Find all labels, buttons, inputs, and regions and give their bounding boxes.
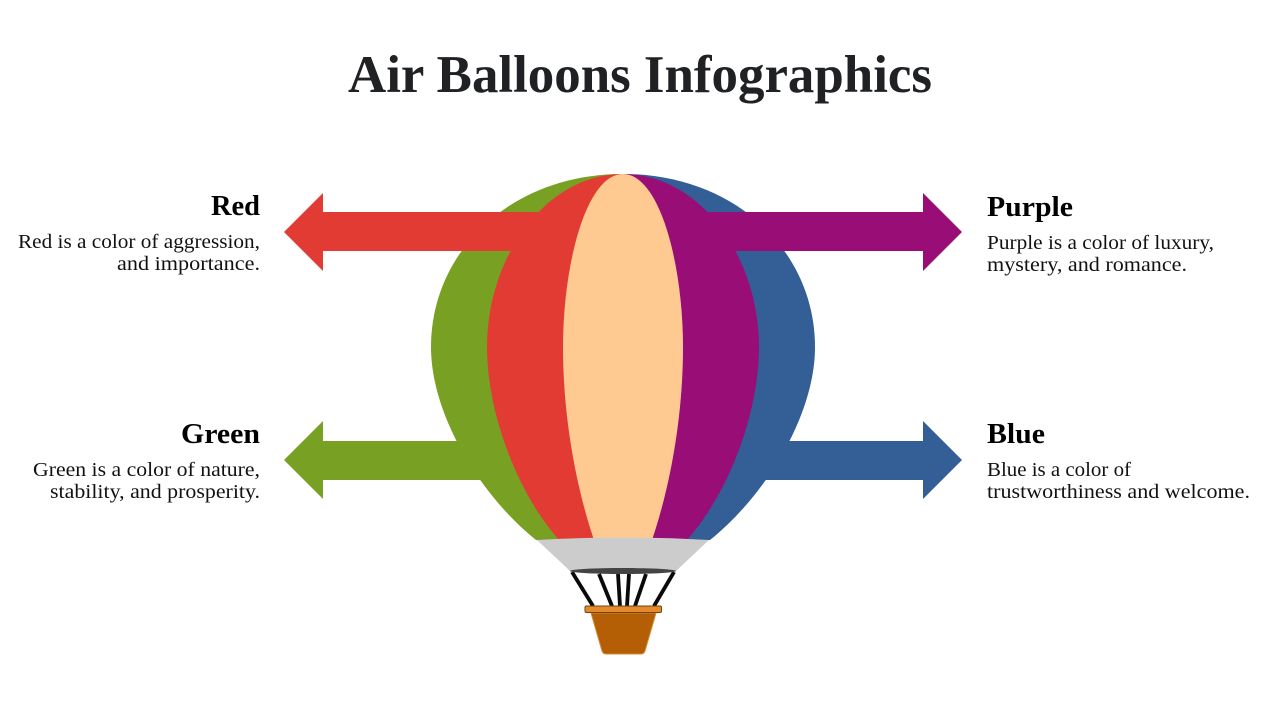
arrow: green [284, 421, 490, 499]
text block: blue: Blue is a color of [987, 460, 1132, 481]
balloon panel: purple [623, 174, 759, 540]
text block: red: and importance. [117, 254, 260, 275]
basket [591, 613, 656, 654]
text block: purple: Purple is a color of luxury, [987, 233, 1214, 254]
ropes [572, 572, 674, 606]
balloon skirt [537, 538, 709, 571]
balloon panel: green [431, 174, 623, 543]
basket rim [585, 606, 662, 612]
text block: red: Red [211, 190, 260, 222]
text block: green: Green [181, 418, 260, 450]
text block: red: Red is a color of aggression, [18, 232, 260, 253]
text block: red [18, 190, 260, 275]
hot air balloon [431, 174, 815, 654]
burner ring [570, 568, 676, 574]
balloon panel: cream centre [563, 174, 683, 540]
text block: blue: Blue [987, 418, 1045, 450]
text block: green: stability, and prosperity. [50, 482, 260, 503]
arrow: blue [756, 421, 962, 499]
balloon panel: blue [623, 174, 815, 543]
text block: purple [987, 191, 1214, 276]
text block: blue [987, 418, 1250, 503]
text block: purple: mystery, and romance. [987, 255, 1187, 276]
text block: green: Green is a color of nature, [33, 460, 260, 481]
arrow: red [284, 193, 545, 271]
arrow: purple [701, 193, 962, 271]
text block: green [33, 418, 260, 503]
text block: blue: trustworthiness and welcome. [987, 482, 1250, 503]
title: Air Balloons Infographics [348, 46, 932, 104]
text block: purple: Purple [987, 191, 1073, 223]
balloon panel: red [487, 174, 623, 540]
